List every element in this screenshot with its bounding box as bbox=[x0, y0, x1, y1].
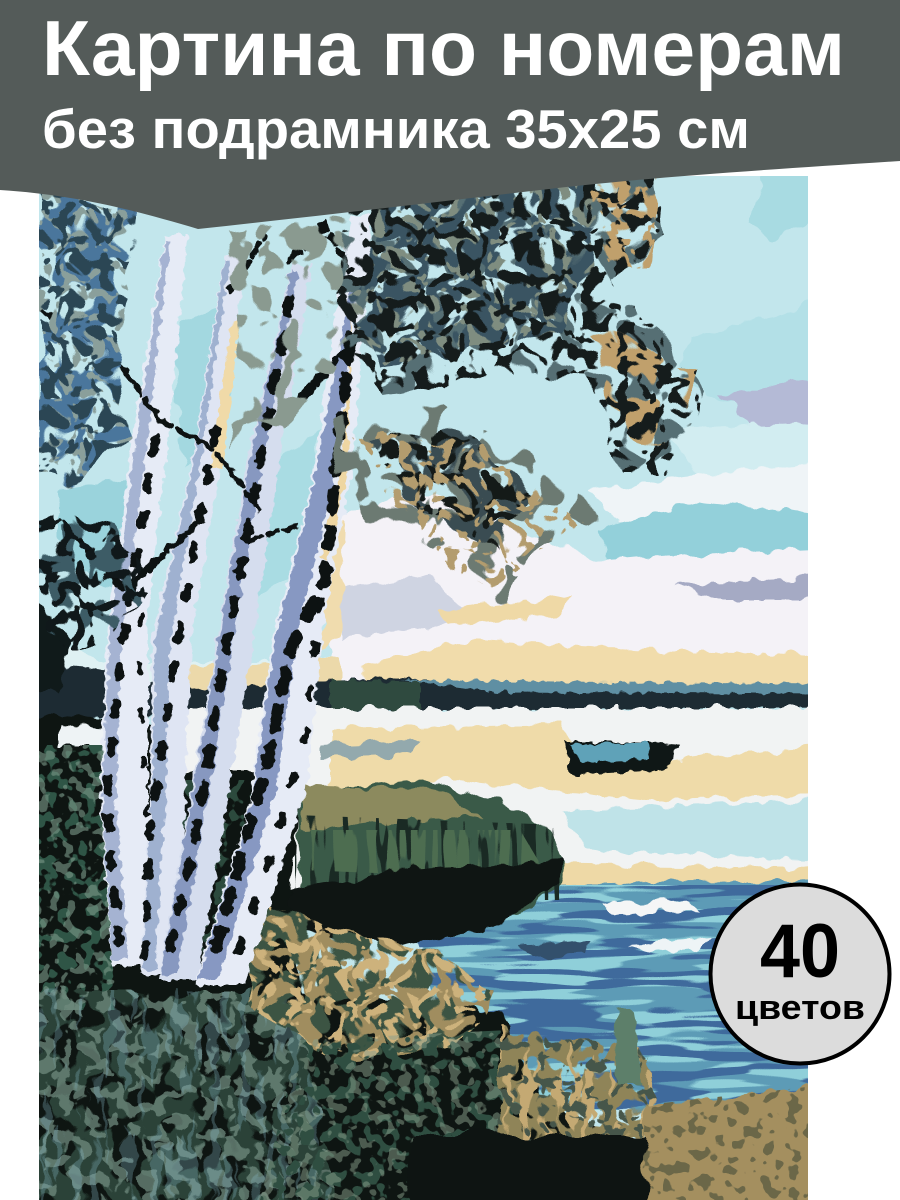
water ripples bbox=[400, 885, 825, 1110]
foreground grass and shrubs bbox=[20, 900, 825, 1200]
title: Картина по номерам bbox=[42, 4, 845, 92]
left shore foliage bbox=[39, 745, 262, 1010]
lake water bbox=[160, 708, 830, 1110]
birch trunks bbox=[100, 215, 372, 985]
distant shore bbox=[30, 665, 825, 720]
birch foliage bbox=[39, 170, 705, 645]
painting: lake landscape with birches bbox=[20, 165, 830, 1200]
badge label: цветов bbox=[735, 989, 865, 1027]
boat bbox=[565, 742, 680, 775]
sky and clouds bbox=[39, 165, 825, 690]
badge: 40 colours bbox=[710, 884, 890, 1064]
reed streaks bbox=[280, 815, 565, 945]
dark left shore bbox=[39, 603, 644, 1200]
subtitle: без подрамника 35х25 см bbox=[42, 98, 750, 160]
badge number: 40 bbox=[760, 909, 840, 994]
reed island bbox=[295, 780, 565, 930]
bark markings and branches bbox=[39, 225, 350, 970]
header banner bbox=[0, 0, 900, 229]
